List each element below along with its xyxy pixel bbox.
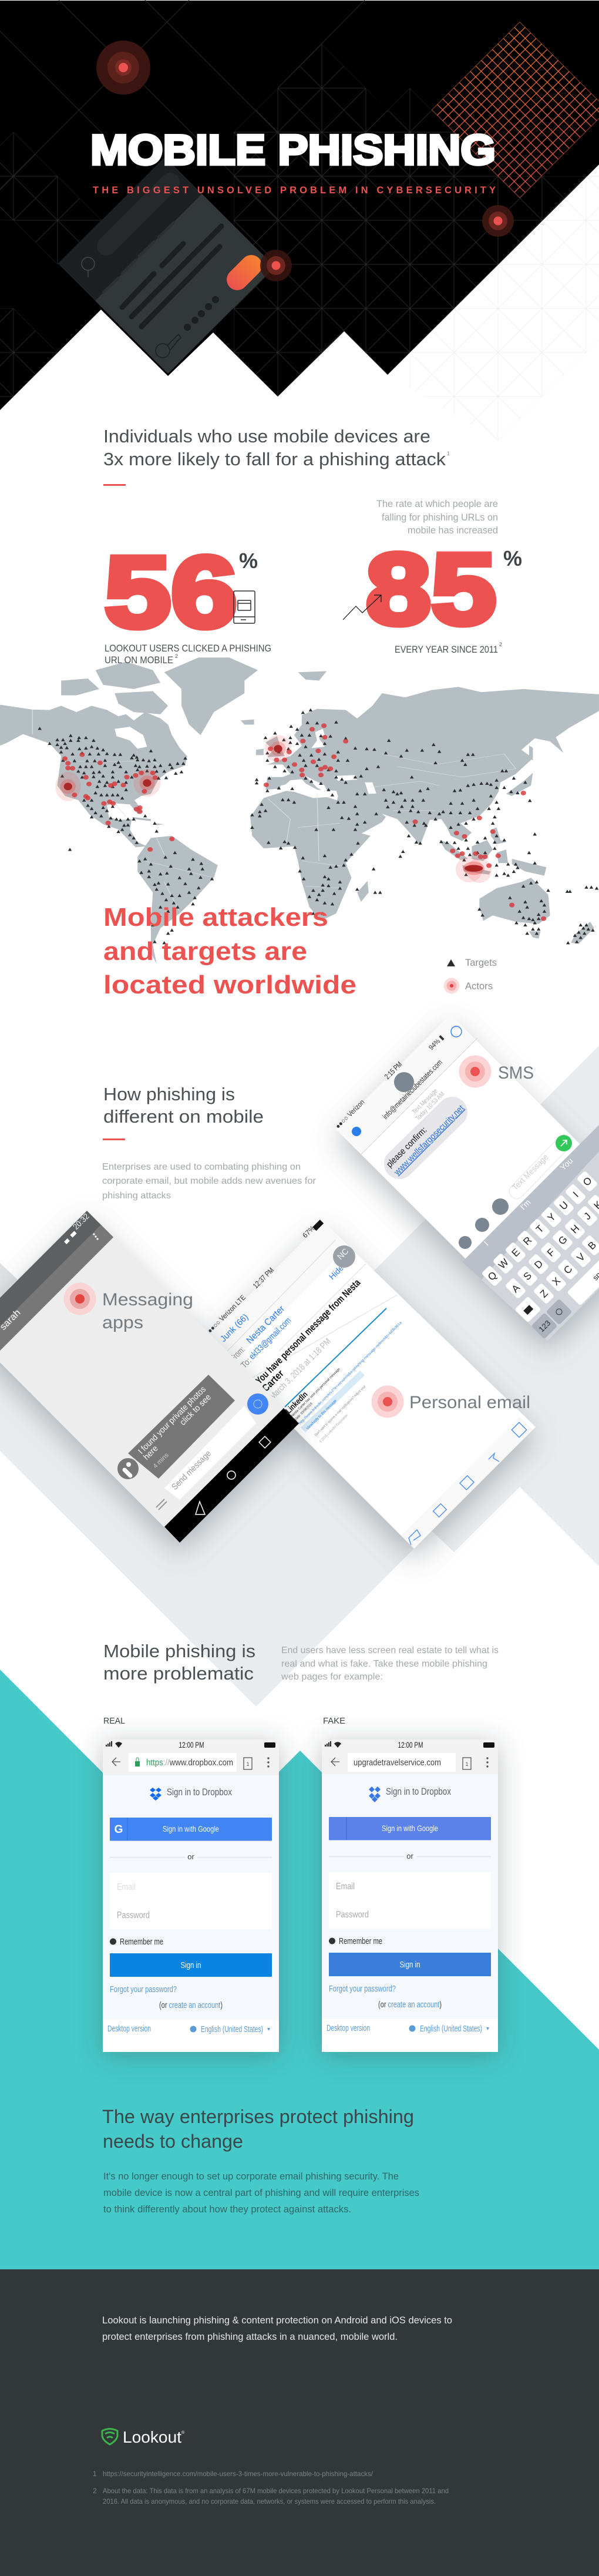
stat: 56 percent: URL ON MOBILE (105, 655, 173, 666)
or divider: or (187, 1852, 194, 1861)
keyboard: W (496, 1257, 511, 1271)
SMS phone card: Today 10:53 AM (415, 1090, 446, 1122)
email body: Date: 03/08/2018 (294, 1402, 314, 1421)
label real: REAL (103, 1716, 125, 1726)
real phone (103, 1739, 279, 2052)
email toolbar icons (409, 1422, 527, 1545)
email body: Nesta Carter has sent you personal message (291, 1367, 341, 1418)
intro heading: Individuals who use mobile devices are (103, 426, 430, 446)
keyboard: X (550, 1275, 563, 1288)
change body: to think differently about how they protect against attacks. (103, 2204, 351, 2215)
fake google button (329, 1817, 491, 1840)
email body (284, 1321, 403, 1443)
orange mesh diamond (432, 22, 599, 198)
how phishing heading (103, 1084, 264, 1127)
SMS message input (510, 1135, 572, 1192)
map heading: Mobile attackers (103, 903, 328, 932)
personal email label (371, 1385, 530, 1418)
email body: http://www.linkedin.com/e/v2?e=xsrvuhmt&a=phishing-message-redirect&t=4d3b361a (298, 1321, 403, 1425)
keyboard (462, 1125, 599, 1341)
how phishing body: Enterprises are used to combating phishing on (102, 1162, 301, 1172)
stat: 56 percent (105, 536, 271, 666)
stat: 85 percent: 85 (366, 533, 496, 646)
keyboard: B (586, 1240, 598, 1252)
map legend: Actors (465, 980, 493, 992)
browser bar: 1 (465, 1761, 469, 1767)
target markers (38, 708, 598, 944)
fake sign in button (329, 1953, 491, 1976)
grey background diamonds (0, 1046, 599, 1707)
SMS header text: 94% ▮ (427, 1033, 445, 1052)
status bar (325, 1740, 494, 1749)
problematic heading: more problematic (103, 1663, 254, 1684)
blue G circle (247, 1393, 268, 1415)
water and borders (32, 710, 516, 911)
login inputs (110, 1873, 272, 1929)
remember me: Remember me (120, 1937, 163, 1947)
change body: It's no longer enough to set up corporate email phishing security. The (103, 2171, 399, 2182)
map heading: and targets are (103, 937, 307, 966)
keyboard: Y (546, 1211, 558, 1224)
email phone card (205, 1220, 536, 1549)
teal background (0, 1670, 599, 2270)
login links: English (United States) (201, 2025, 263, 2034)
login links: English (United States) (420, 2024, 482, 2034)
keyboard: C (561, 1263, 574, 1276)
subtitle: THE BIGGEST UNSOLVED PROBLEM IN CYBERSECURITY (93, 185, 496, 196)
SMS header text: info@metairieclubestates.com (381, 1058, 444, 1121)
problematic heading (103, 1641, 255, 1684)
dark triangle lattice (0, 0, 599, 410)
keyboard: S (521, 1270, 534, 1282)
stat: 85 percent: % (503, 546, 522, 570)
login links: (or create an account) (378, 2000, 442, 2010)
stat: 56 percent: LOOKOUT USERS CLICKED A PHISHING (105, 643, 271, 654)
login links (107, 1985, 270, 2034)
change heading: needs to change (103, 2131, 243, 2152)
SMS header text (334, 1026, 462, 1136)
actor markers (62, 723, 546, 921)
icon: paperclip (156, 1499, 167, 1510)
lookout logo: ® (181, 2430, 185, 2435)
black mountain background (0, 1, 599, 410)
SMS label: SMS (498, 1063, 534, 1083)
how phishing body: phishing attacks (102, 1191, 171, 1201)
problematic body: End users have less screen real estate to tell what is (281, 1645, 499, 1655)
footnotes: 1 (93, 2470, 97, 2478)
status bar (106, 1740, 275, 1749)
how phishing body: corporate email, but mobile adds new avenues for (102, 1176, 317, 1186)
hero panel (0, 0, 599, 470)
SMS bubble: www.wellsfargosecurity.net (392, 1103, 466, 1177)
change body (103, 2171, 419, 2215)
change heading (102, 2106, 414, 2152)
login inputs: Email (117, 1882, 136, 1892)
personal email label: Personal email (409, 1393, 530, 1412)
stat: 56 percent: % (239, 549, 258, 573)
label fake: FAKE (323, 1716, 345, 1726)
keyboard: J (582, 1211, 593, 1222)
scam message bubble (128, 1375, 235, 1479)
keyboard: H (568, 1222, 581, 1235)
map heading: located worldwide (103, 970, 356, 999)
keyboard: D (532, 1258, 545, 1271)
message input: Send message (170, 1449, 213, 1492)
email body: LinkedIn (284, 1389, 309, 1415)
closing statement: Lookout is launching phishing & content protection on Android and iOS devices to (102, 2315, 452, 2326)
browser bar: 1 (246, 1761, 250, 1767)
scam message bubble: 4 mins (152, 1452, 170, 1470)
or divider: or (406, 1852, 413, 1860)
keyboard: A (510, 1282, 523, 1295)
sender avatar (117, 1458, 139, 1479)
email body: Don't want to receive e-mail notifications? Adjust your (314, 1385, 366, 1437)
keyboard: R (521, 1234, 534, 1247)
world map (0, 657, 599, 964)
closing statement: protect enterprises from phishing attacks in a nuanced, mobile world. (102, 2331, 398, 2342)
footnotes: About the data: This data is from an analysis of 67M mobile devices protected by Lookout Personal between 2011 and (103, 2487, 449, 2495)
login links: Desktop version (107, 2024, 151, 2034)
remember me (110, 1937, 163, 1947)
icon: red target on card (260, 250, 292, 281)
remember me: Remember me (339, 1936, 382, 1946)
email header text: Nesta Carter (245, 1304, 287, 1346)
google button: G (115, 1823, 123, 1836)
keyboard: I'm (518, 1197, 533, 1212)
keyboard: 123 (537, 1318, 552, 1334)
real phone: Sign in to Dropbox (167, 1786, 232, 1798)
fake google button: Sign in with Google (382, 1823, 438, 1833)
footnotes (93, 2470, 449, 2506)
SMS phone card (334, 1015, 599, 1341)
email header text: 12:37 PM (251, 1265, 275, 1290)
problematic body: web pages for example: (281, 1672, 383, 1682)
browser bar: https://www.dropbox.com (146, 1758, 233, 1768)
map legend (444, 957, 497, 994)
email header text: To: (239, 1356, 254, 1371)
email header text: ekl33@gmail.com (247, 1315, 293, 1362)
keyboard: I (571, 1190, 581, 1200)
email header text: 67% (301, 1224, 317, 1240)
messaging apps label: Messaging (102, 1290, 193, 1309)
messaging apps label: apps (102, 1313, 143, 1332)
how phishing heading: How phishing is (103, 1084, 235, 1104)
login links: Forgot your password? (110, 1985, 177, 1994)
faint lattice on white (388, 164, 599, 441)
keyboard: E (510, 1247, 522, 1259)
title: MOBILE PHISHING (90, 127, 496, 174)
keyboard: You (558, 1156, 574, 1172)
footnotes: 2 (93, 2487, 97, 2495)
closing statement (102, 2315, 452, 2342)
fake phone (322, 1739, 498, 2052)
footer panel (0, 2269, 599, 2576)
stat: 85 percent: 2 (499, 642, 502, 647)
scam message bubble: click to see (179, 1392, 213, 1428)
SMS phone card: Text Message (411, 1087, 439, 1116)
footnotes: https://securityintelligence.com/mobile-users-3-times-more-vulnerable-to-phishing-attacks/ (103, 2470, 373, 2478)
message input (164, 1406, 256, 1500)
SMS bubble: please confirm: (385, 1125, 429, 1170)
keyboard: G (556, 1234, 570, 1247)
email header text: ●●○○ Verizon LTE (206, 1293, 247, 1335)
how phishing body (102, 1162, 317, 1201)
messaging status text: 20:32 (71, 1211, 91, 1231)
SMS label (459, 1055, 534, 1088)
email header text: NC (335, 1246, 350, 1261)
keyboard: U (557, 1199, 570, 1212)
login inputs: Email (336, 1882, 355, 1892)
login links: Forgot your password? (329, 1984, 396, 1994)
browser bar: upgradetravelservice.com (354, 1758, 441, 1768)
messaging apps label (63, 1283, 193, 1332)
map legend: Targets (465, 957, 497, 968)
stat: 56 percent: 2 (175, 653, 178, 659)
intro heading: 3x more likely to fall for a phishing attack (103, 449, 446, 469)
icon: red target top left (96, 41, 150, 95)
change heading: The way enterprises protect phishing (102, 2106, 414, 2127)
fake sign in button: Sign in (399, 1960, 420, 1970)
browser bar (331, 1753, 489, 1772)
red rule (103, 484, 126, 486)
SMS header text: 2:15 PM (383, 1060, 404, 1081)
scam message bubble: I found your private photos (137, 1385, 208, 1456)
login inputs: Password (336, 1910, 369, 1920)
icon: dropbox (150, 1788, 161, 1801)
actor halos (55, 735, 492, 883)
login links (327, 1984, 489, 2034)
messaging phone card (0, 1211, 299, 1543)
change body: mobile device is now a central part of phishing and will require enterprises (103, 2187, 419, 2198)
status bar: 12:00 PM (398, 1740, 423, 1749)
login inputs: Password (117, 1910, 150, 1920)
lookout logo: Lookout (123, 2428, 181, 2446)
email subject: Carter (260, 1368, 286, 1394)
login inputs (329, 1872, 491, 1929)
messaging status text (0, 1211, 99, 1332)
keyboard: I (482, 1239, 490, 1247)
icon: phone (234, 591, 255, 623)
map heading (103, 903, 356, 999)
login links: Desktop version (327, 2024, 370, 2033)
email header text: From: (228, 1345, 247, 1363)
stat: 85 percent: falling for phishing URLs on (382, 512, 498, 523)
email subject: March 3, 2018 at 1:18 PM (268, 1336, 333, 1402)
intro heading: 1 (447, 451, 450, 456)
stat: 85 percent: The rate at which people are (376, 498, 498, 509)
stat: 85 percent (343, 498, 522, 655)
icon: fake dropbox (369, 1786, 381, 1802)
keyboard: Z (538, 1288, 550, 1300)
sign in button: Sign in (181, 1960, 201, 1970)
fake phone: Sign in to Dropbox (386, 1786, 451, 1797)
keyboard: F (545, 1247, 557, 1259)
problematic body: real and what is fake. Take these mobile phishing (281, 1659, 487, 1669)
login links: (or create an account) (159, 2001, 223, 2010)
email header text (206, 1220, 355, 1371)
keyboard: Q (486, 1269, 499, 1283)
email header text: Junk (66) (218, 1312, 250, 1344)
icon: trend arrow (343, 595, 381, 620)
problematic body (281, 1645, 499, 1682)
email header text: Hide (327, 1263, 345, 1281)
email subject (253, 1277, 363, 1402)
landmasses (0, 657, 599, 964)
problematic heading: Mobile phishing is (103, 1641, 255, 1661)
remember me (329, 1936, 382, 1946)
icon: red target right (482, 205, 514, 237)
SMS header text: ●●○○ Verizon (334, 1098, 366, 1130)
red rule (103, 1138, 125, 1140)
how phishing heading: different on mobile (103, 1106, 264, 1127)
browser bar (112, 1753, 270, 1772)
keyboard: T (534, 1223, 546, 1235)
stat: 56 percent: 56 (105, 536, 237, 649)
scam message bubble: here (142, 1444, 160, 1462)
keyboard: O (581, 1175, 594, 1188)
stat: 85 percent: mobile has increased (408, 525, 498, 536)
email subject: You have personal message from Nesta (253, 1277, 363, 1386)
google button (110, 1818, 272, 1841)
icon: phishing card (58, 157, 275, 374)
sign in button (110, 1953, 272, 1977)
google button: Sign in with Google (163, 1824, 219, 1833)
SMS message input: Text Message (510, 1152, 550, 1192)
android nav icons (196, 1436, 271, 1514)
keyboard: V (575, 1251, 588, 1264)
intro heading (103, 426, 450, 469)
SMS toolbar icons (459, 1198, 509, 1249)
stat: 85 percent: EVERY YEAR SINCE 2011 (395, 644, 498, 655)
email body: View/reply to this message (305, 1399, 338, 1430)
footnotes: 2016. All data is anonymous, and no corporate data, networks, or systems were accessed to perform this analysis. (103, 2497, 436, 2506)
email body: © 2018, LinkedIn Corporation (318, 1413, 349, 1443)
status bar: 12:00 PM (179, 1740, 204, 1749)
